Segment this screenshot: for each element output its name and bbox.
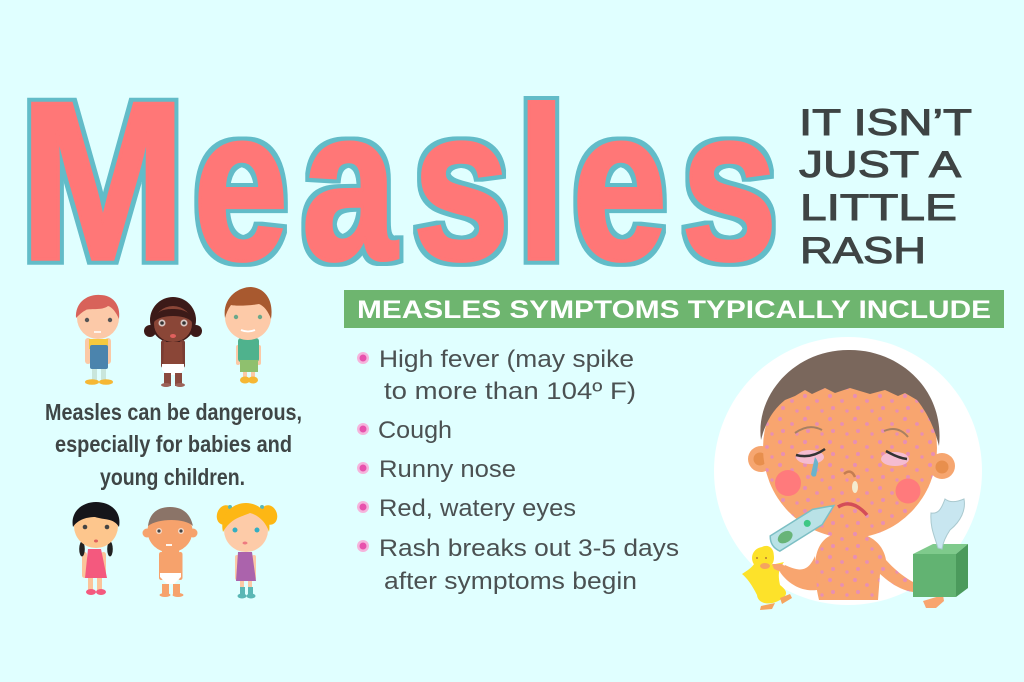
subtitle: RASH — [800, 230, 926, 271]
thermometer — [768, 499, 839, 553]
title: a — [302, 63, 399, 305]
warning text: especially for babies and — [55, 431, 292, 457]
icon: child with brown hair and green shirt — [225, 287, 272, 384]
illustration: sick boy — [714, 337, 982, 610]
title — [19, 54, 778, 307]
rubber duck — [742, 546, 792, 610]
symptom: rash — [357, 535, 679, 595]
warning text — [45, 399, 302, 490]
symptom: high fever: High fever (may spike — [379, 346, 634, 373]
symptoms list — [357, 346, 679, 595]
icon: child with red hair and overalls — [76, 295, 119, 385]
symptom: rash: after symptoms begin — [384, 568, 637, 595]
symptom: cough: Cough — [378, 417, 452, 444]
symptom: high fever: to more than 104º F) — [384, 378, 636, 405]
title: e — [193, 63, 288, 305]
subtitle: JUST A — [799, 144, 961, 185]
title: M — [19, 54, 186, 307]
subtitle: LITTLE — [800, 187, 957, 228]
boy head — [748, 350, 955, 538]
title: e — [572, 63, 667, 305]
icon: girl with black pigtails — [73, 502, 119, 595]
icon: child with dark skin and curly hair — [144, 297, 202, 387]
symptoms banner — [344, 290, 1004, 328]
title: s — [681, 63, 778, 305]
title: l — [516, 63, 566, 305]
title: s — [413, 63, 510, 305]
symptom: rash: Rash breaks out 3-5 days — [379, 535, 679, 562]
boy body — [780, 534, 944, 608]
icon: baby in diaper — [142, 507, 198, 597]
symptom: high fever — [357, 346, 636, 405]
icon: girl with blonde pigtails — [214, 503, 280, 598]
subtitle — [799, 102, 972, 271]
subtitle: IT ISN’T — [799, 102, 972, 143]
warning text: young children. — [100, 464, 245, 490]
symptom: red, watery eyes: Red, watery eyes — [379, 495, 576, 522]
symptom: runny nose: Runny nose — [379, 456, 516, 483]
symptoms banner: MEASLES SYMPTOMS TYPICALLY INCLUDE — [357, 296, 991, 324]
tissue box — [913, 499, 968, 597]
white circle backdrop — [714, 337, 982, 605]
warning text: Measles can be dangerous, — [45, 399, 302, 425]
